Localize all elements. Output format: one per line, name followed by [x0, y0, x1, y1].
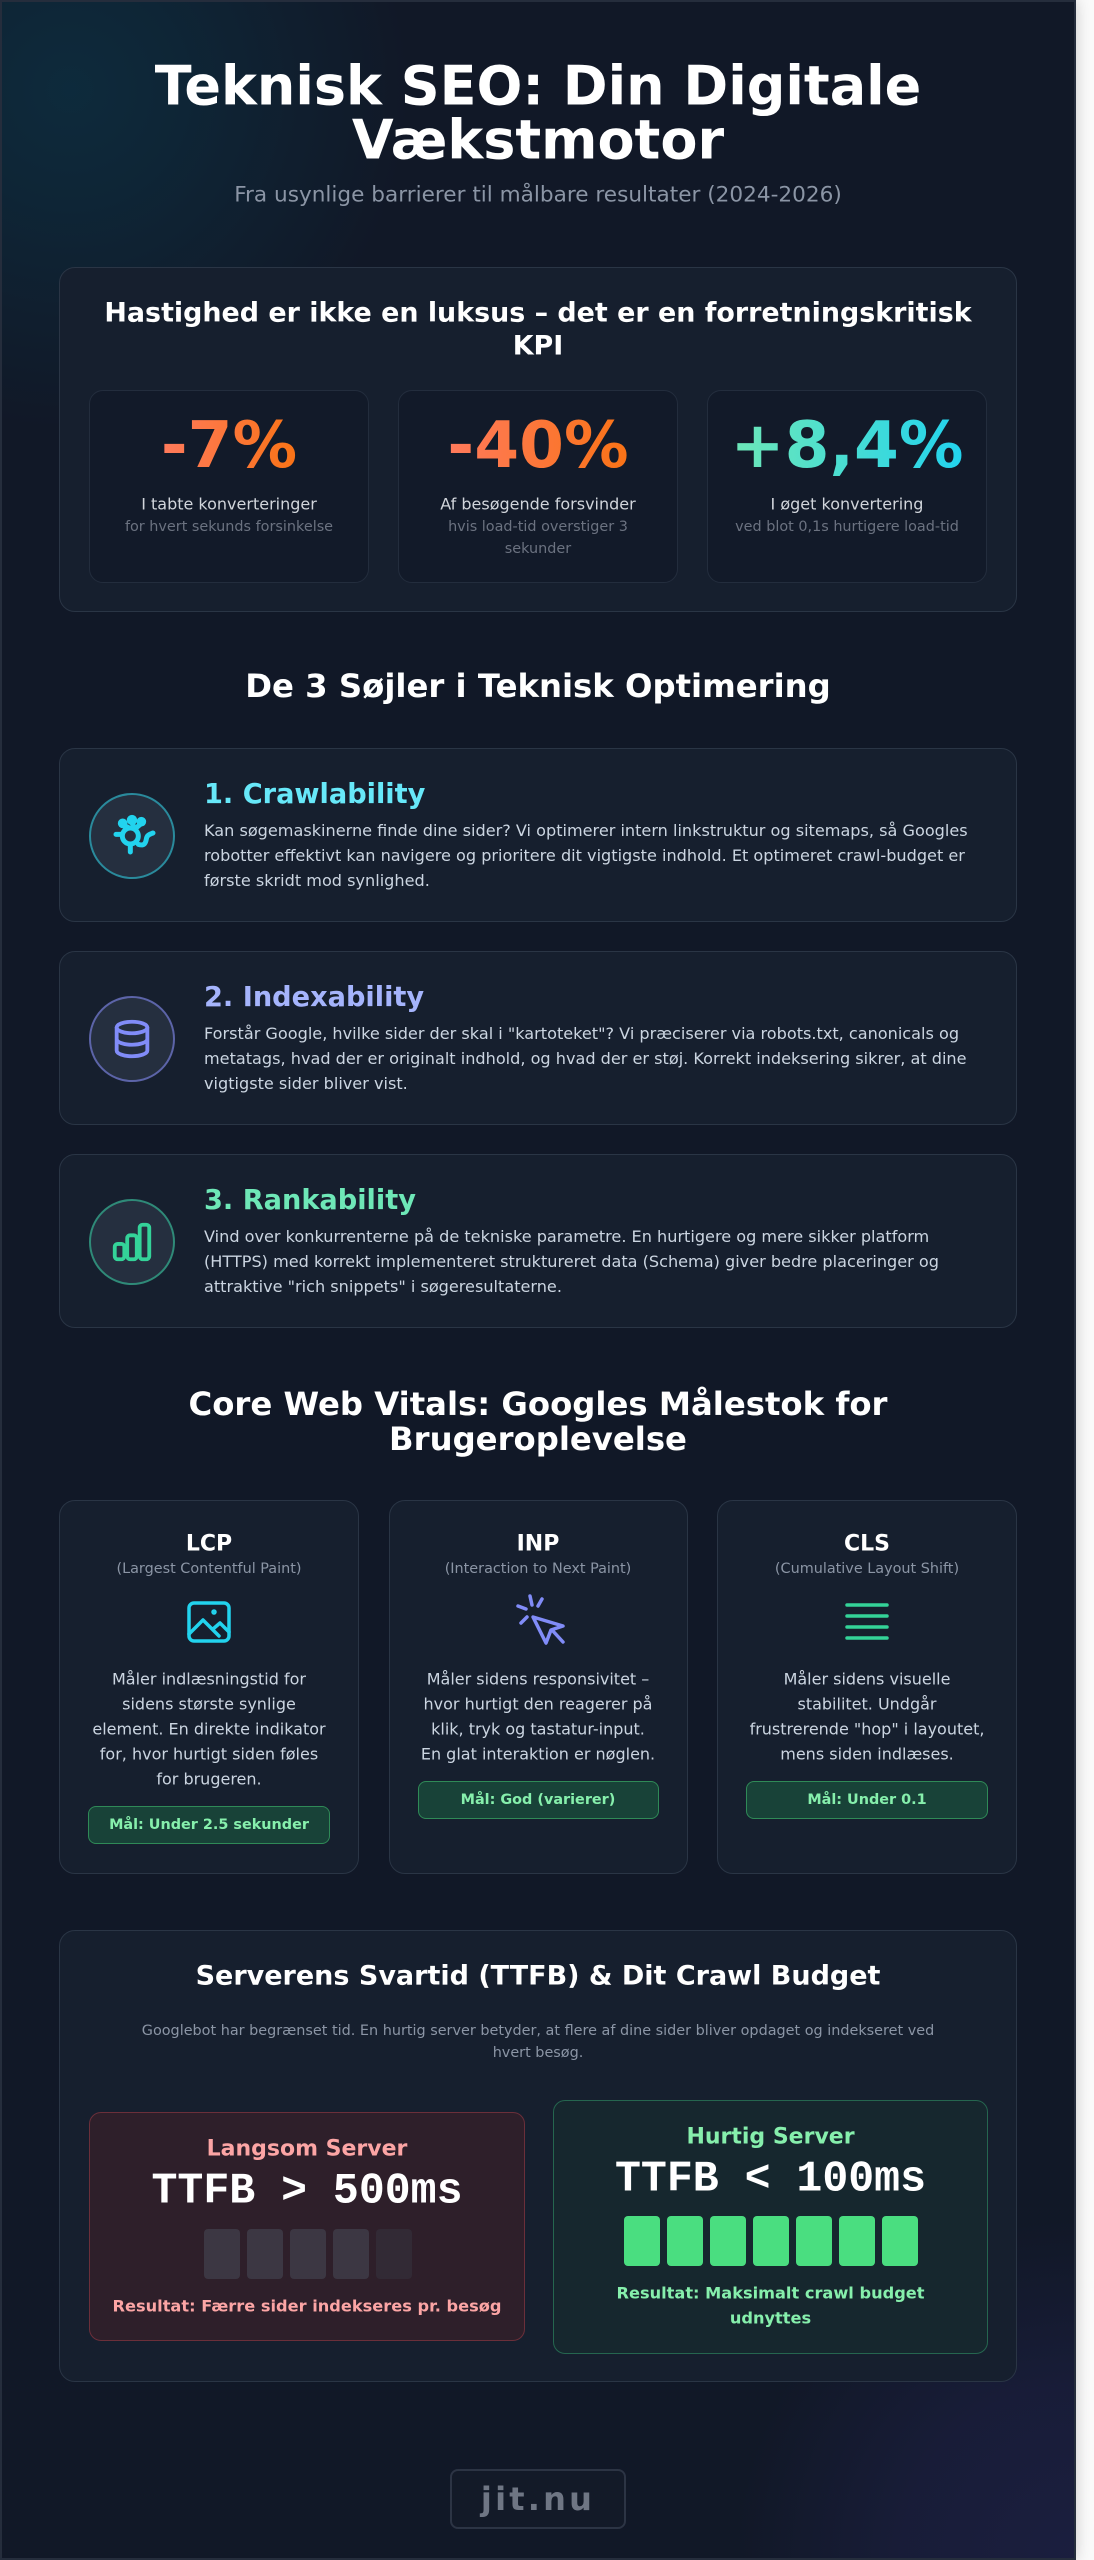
- subtitle: Fra usynlige barrierer til målbare resultater (2024-2026): [234, 182, 842, 208]
- result: Resultat: Maksimalt crawl budget: [616, 2284, 924, 2302]
- card title: Hurtig Server: [686, 2124, 855, 2150]
- stat card: -40%: sekunder: [505, 541, 571, 557]
- pillar title: 3. Rankability: [204, 1185, 416, 1216]
- metric text: for, hvor hurtigt siden føles: [100, 1744, 318, 1764]
- result: [616, 2284, 924, 2328]
- metric text: hvor hurtigt den reagerer på: [424, 1694, 652, 1714]
- icon: cursor click: [516, 1594, 565, 1645]
- metric subtitle: (Cumulative Layout Shift): [775, 1561, 959, 1577]
- description: Googlebot har begrænset tid. En hurtig server betyder, at flere af dine sider bliver opdaget og indekseret ved: [142, 2023, 934, 2039]
- heading: core web vitals: Brugeroplevelse: [389, 1420, 687, 1458]
- goal badge: Mål: Under 2.5 sekunder: [109, 1817, 309, 1833]
- stat card: -7%: -7%: [161, 408, 297, 483]
- pillar text: robotter effektivt kan navigere og prioritere dit vigtigste indhold. Et optimeret crawl-budget er: [204, 846, 965, 865]
- stat card: -40%: Af besøgende forsvinder: [440, 494, 636, 514]
- logo: jit.nu: [450, 2469, 626, 2529]
- panel: speed KPI: [59, 267, 1017, 612]
- stat card: +8,4%: [707, 390, 987, 583]
- stat card: -7%: I tabte konverteringer: [141, 494, 317, 514]
- heading: speed KPI: KPI: [513, 330, 563, 362]
- metric text: sidens største synlige: [122, 1694, 296, 1714]
- metric text: Måler sidens responsivitet –: [427, 1670, 649, 1688]
- stat card: -40%: -40%: [447, 408, 629, 483]
- icon: image: [187, 1601, 231, 1643]
- pillar title: 2. Indexability: [204, 982, 424, 1013]
- pillar text: attraktive "rich snippets" i søgeresultaterne.: [204, 1277, 562, 1296]
- description: [142, 2023, 934, 2061]
- TTFB value: TTFB > 500ms: [151, 2166, 462, 2216]
- goal badge: [746, 1781, 988, 1819]
- panel: rankability: [59, 1154, 1017, 1328]
- heading: three pillars: De 3 Søjler i Teknisk Optimering: [245, 667, 831, 705]
- metric text: [750, 1670, 984, 1764]
- pillar text: Forstår Google, hvilke sider der skal i "kartoteket"? Vi præciserer via robots.txt, canonicals og: [204, 1024, 959, 1043]
- metric text: stabilitet. Undgår: [797, 1694, 936, 1714]
- crawl bars: [204, 2229, 412, 2279]
- crawl bars: [624, 2216, 918, 2266]
- goal badge: Mål: God (varierer): [461, 1792, 615, 1808]
- goal badge: Mål: Under 0.1: [807, 1792, 927, 1808]
- icon: lines: [845, 1603, 889, 1640]
- title: [155, 54, 921, 172]
- metric subtitle: (Interaction to Next Paint): [445, 1561, 631, 1577]
- panel: TTFB: [59, 1930, 1017, 2382]
- metric text: [421, 1670, 655, 1764]
- card: slow server: [89, 2112, 525, 2341]
- heading: speed KPI: Hastighed er ikke en luksus – det er en forretningskritisk: [104, 298, 972, 328]
- logo: jit.nu: jit.nu: [481, 2480, 595, 2518]
- card: fast server: [553, 2100, 988, 2354]
- metric text: for brugeren.: [156, 1770, 262, 1788]
- panel: CLS: [717, 1500, 1017, 1874]
- pillar text: [204, 821, 968, 890]
- metric subtitle: (Largest Contentful Paint): [116, 1561, 302, 1577]
- TTFB value: TTFB < 100ms: [615, 2154, 926, 2204]
- panel: INP: [388, 1500, 688, 1874]
- goal badge: [88, 1806, 330, 1844]
- pillar text: metatags, hvad der er originalt indhold, og hvad der er støj. Korrekt indeksering sikrer, at dine: [204, 1049, 967, 1068]
- pillar text: Vind over konkurrenterne på de tekniske parametre. En hurtigere og mere sikker platform: [204, 1227, 929, 1246]
- metric name: LCP: [186, 1532, 232, 1556]
- pillar text: første skridt mod synlighed.: [204, 871, 430, 890]
- icon: crawl bug: [89, 793, 175, 879]
- result: udnyttes: [730, 2308, 811, 2328]
- title: Teknisk SEO: Din Digitale: [155, 54, 921, 118]
- stat card: -40%: hvis load-tid overstiger 3: [448, 519, 628, 535]
- card title: Langsom Server: [207, 2136, 407, 2162]
- metric text: frustrerende "hop" i layoutet,: [750, 1720, 984, 1738]
- result: Resultat: Færre sider indekseres pr. besøg: [113, 2296, 501, 2316]
- pillar text: [204, 1227, 939, 1296]
- metric text: element. En direkte indikator: [92, 1720, 326, 1738]
- pillar text: (HTTPS) med korrekt implementeret struktureret data (Schema) giver bedre placeringer og: [204, 1252, 939, 1271]
- stat card: -40%: [398, 390, 678, 583]
- heading: core web vitals: Core Web Vitals: Googles Målestok for: [188, 1385, 888, 1423]
- panel: crawlability: [59, 748, 1017, 922]
- metric text: Måler indlæsningstid for: [112, 1670, 306, 1688]
- description: hvert besøg.: [493, 2045, 583, 2061]
- pillar text: vigtigste sider bliver vist.: [204, 1074, 408, 1093]
- heading: core web vitals: [188, 1385, 888, 1458]
- panel: indexability: [59, 951, 1017, 1125]
- metric name: CLS: [844, 1532, 890, 1556]
- pillar text: [204, 1024, 967, 1093]
- icon: database: [89, 996, 175, 1082]
- icon: bar chart: [89, 1199, 175, 1285]
- stat card: +8,4%: ved blot 0,1s hurtigere load-tid: [735, 519, 959, 535]
- title: Vækstmotor: [352, 108, 724, 172]
- metric text: Måler sidens visuelle: [784, 1670, 950, 1688]
- panel: LCP: [59, 1500, 359, 1874]
- stat card: +8,4%: I øget konvertering: [771, 494, 923, 514]
- metric name: INP: [517, 1532, 559, 1556]
- metric text: klik, tryk og tastatur-input.: [431, 1720, 645, 1738]
- heading: TTFB: Serverens Svartid (TTFB) & Dit Crawl Budget: [196, 1960, 880, 1992]
- stat card: +8,4%: +8,4%: [731, 408, 963, 483]
- metric text: [92, 1670, 326, 1788]
- metric text: mens siden indlæses.: [780, 1744, 954, 1764]
- stat card: -7%: [89, 390, 369, 583]
- goal badge: [418, 1781, 658, 1819]
- pillar text: Kan søgemaskinerne finde dine sider? Vi optimerer intern linkstruktur og sitemaps, så Googles: [204, 821, 968, 840]
- pillar title: 1. Crawlability: [204, 779, 425, 810]
- stat card: -7%: for hvert sekunds forsinkelse: [125, 519, 333, 535]
- metric text: En glat interaktion er nøglen.: [421, 1744, 655, 1764]
- heading: speed KPI: [104, 298, 972, 362]
